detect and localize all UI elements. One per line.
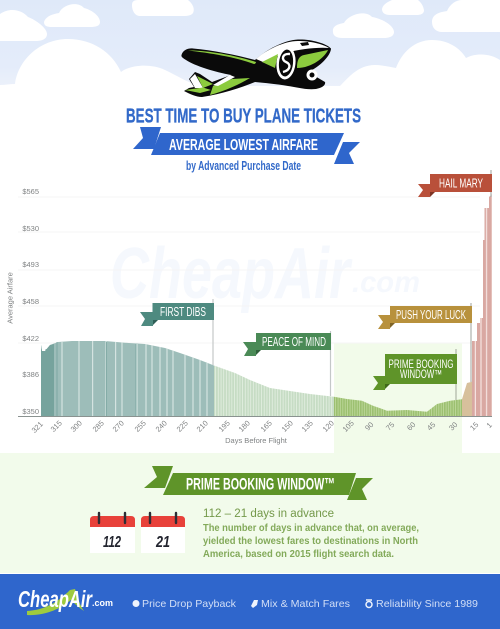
x axis title: Days Before Flight [225, 436, 288, 445]
x axis [18, 416, 492, 418]
x axis labels: 165 [259, 419, 274, 434]
feature: mix and match fares: Mix & Match Fares [261, 598, 350, 610]
panel: prime booking window [0, 453, 500, 573]
icon: calendar 21 [141, 513, 185, 553]
bars: peace of mind [214, 366, 334, 416]
y axis labels [22, 187, 39, 416]
flag: hail mary [418, 170, 492, 197]
x axis labels: 1 [485, 421, 494, 430]
bars: push your luck [462, 382, 472, 416]
y axis labels: $386 [22, 370, 39, 379]
flag: peace of mind: PEACE OF MIND [262, 335, 326, 349]
flag: first dibs: FIRST DIBS [160, 305, 206, 319]
feature: price drop payback: Price Drop Payback [142, 598, 237, 610]
footer [0, 574, 500, 629]
bars: first dibs [41, 341, 214, 416]
text: description: yielded the lowest fares to destinations in North [203, 536, 418, 547]
x axis labels: 60 [405, 420, 417, 432]
subtitle: by Advanced Purchase Date [186, 159, 301, 173]
x axis labels: 240 [154, 419, 169, 434]
sky with clouds [0, 0, 500, 140]
prime window highlight [334, 343, 462, 453]
icon: calendar 21: 21 [155, 534, 170, 551]
x axis labels: 45 [425, 420, 437, 432]
flag: prime booking window: WINDOW™ [400, 369, 442, 381]
flag: peace of mind [243, 331, 331, 396]
banner: average lowest airfare [133, 127, 360, 164]
large cloud bank [0, 39, 500, 140]
flag: prime booking window: PRIME BOOKING [388, 359, 454, 371]
flag: push your luck [378, 303, 472, 382]
flag: first dibs [140, 299, 214, 365]
text: day range heading: 112 – 21 days in advance [203, 508, 334, 520]
watermark logo: CheapAir [110, 234, 353, 314]
x axis labels: 15 [468, 420, 480, 432]
x axis labels: 120 [321, 419, 336, 434]
y axis labels: $458 [22, 297, 39, 306]
icon: calendar 112: 112 [103, 534, 121, 551]
y axis labels: $530 [22, 224, 39, 233]
y axis labels: $422 [22, 334, 39, 343]
y axis labels: $493 [22, 260, 39, 269]
bars: hail mary [472, 194, 492, 416]
x axis labels: 285 [91, 419, 106, 434]
x axis labels: 321 [30, 420, 45, 435]
title: BEST TIME TO BUY PLANE TICKETS [126, 104, 361, 128]
y axis title: Average Airfare [6, 272, 14, 324]
x axis labels: 75 [384, 420, 396, 432]
x axis labels [30, 419, 494, 435]
feature: reliability since 1989: Reliability Since 1989 [376, 598, 478, 610]
x axis labels: 210 [195, 419, 210, 434]
bar chart: average airfare [18, 194, 492, 416]
x axis labels: 30 [447, 420, 459, 432]
banner: average lowest airfare: AVERAGE LOWEST AIRFARE [169, 137, 318, 154]
x axis labels: 90 [363, 420, 375, 432]
icon: calendar 112 [90, 513, 135, 553]
text: description [203, 523, 419, 560]
x axis labels: 225 [175, 419, 190, 434]
banner: prime booking window [144, 466, 373, 500]
logo: CheapAir.com: CheapAir [18, 586, 93, 612]
x axis labels: 255 [133, 419, 148, 434]
icon: green airplane [181, 39, 331, 97]
x axis labels: 315 [49, 419, 64, 434]
x axis labels: 195 [217, 419, 232, 434]
x axis labels: 300 [69, 419, 84, 434]
y axis labels: $350 [22, 407, 39, 416]
text: description: The number of days in advance that, on average, [203, 523, 419, 534]
x axis labels: 135 [300, 419, 315, 434]
x axis labels: 105 [341, 419, 356, 434]
x axis labels: 180 [237, 419, 252, 434]
banner: prime booking window: PRIME BOOKING WINDOW™ [186, 476, 335, 494]
y axis labels: $565 [22, 187, 39, 196]
flag: prime booking window [373, 349, 457, 400]
logo: CheapAir.com: .com [92, 598, 113, 609]
x axis labels: 150 [280, 419, 295, 434]
x axis labels: 270 [111, 419, 126, 434]
text: description: America, based on 2015 flight search data. [203, 549, 394, 560]
watermark logo: .com [352, 266, 420, 299]
bars: prime booking window [334, 397, 462, 416]
